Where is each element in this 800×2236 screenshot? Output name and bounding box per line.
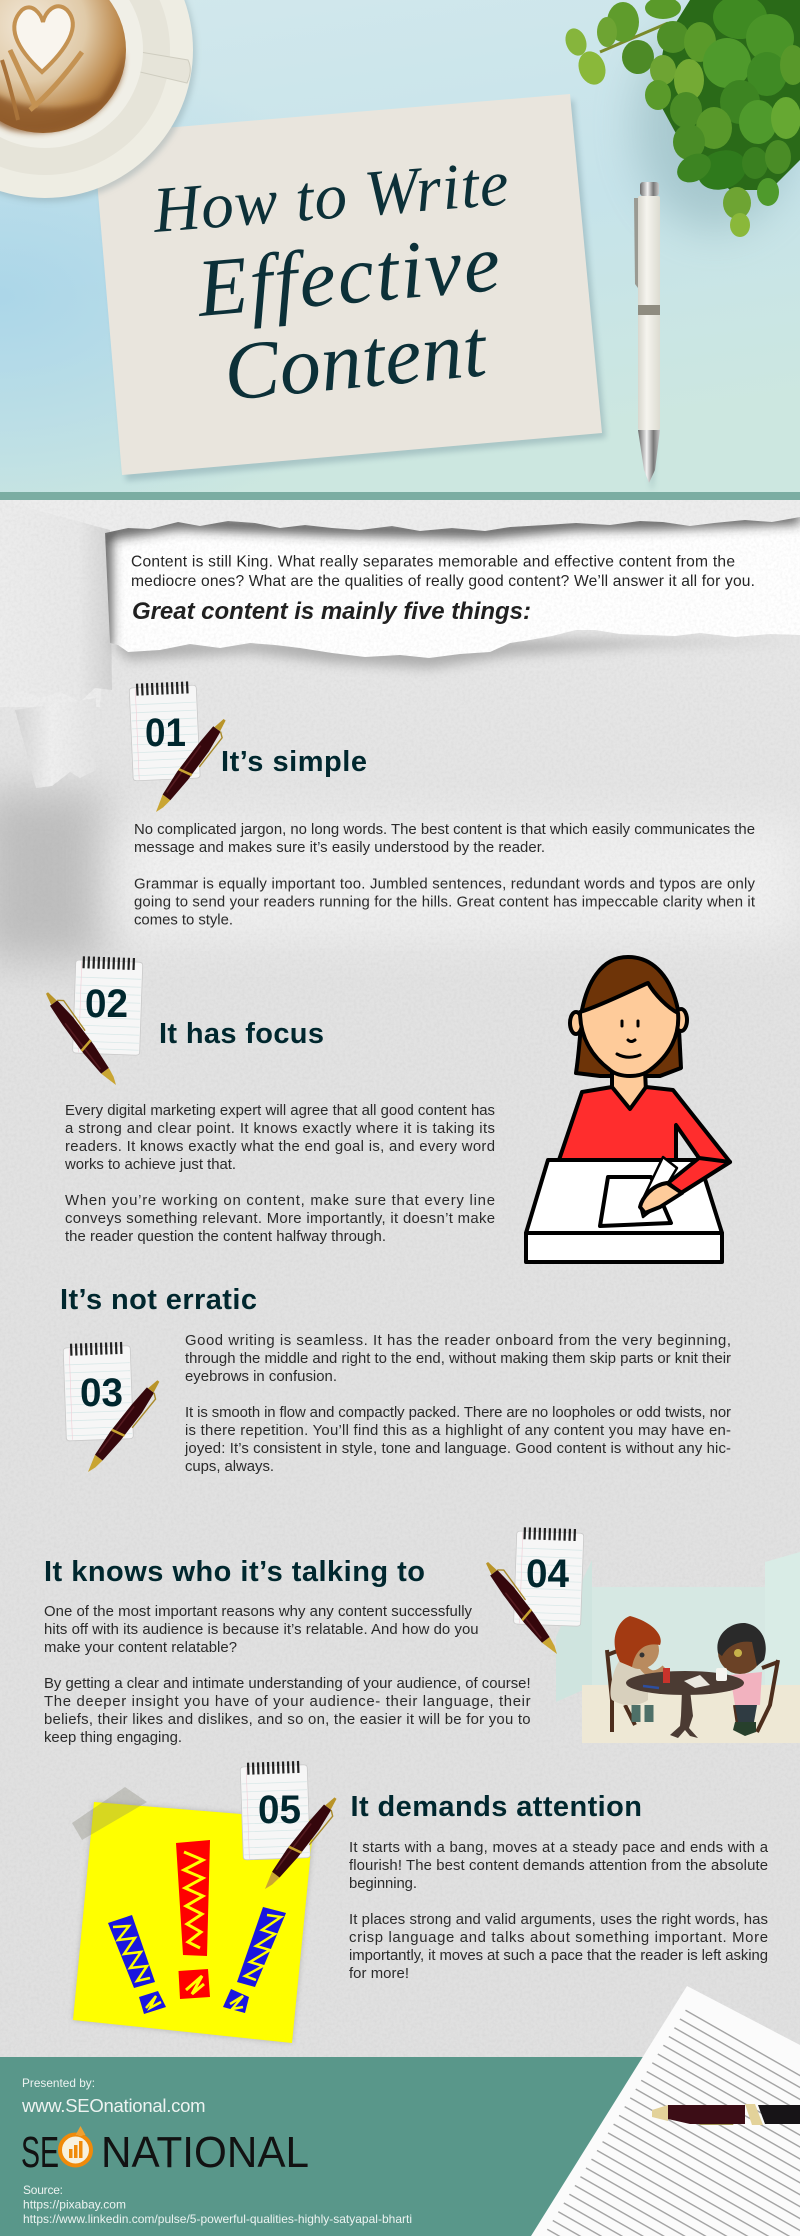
presented by text: Presented by:	[22, 2076, 95, 2090]
body text 04: hits off with its audience is because it’s relatable. And how do you	[44, 1622, 479, 1638]
body text 03: Good writing is seamless. It has the reader onboard from the very beginning,	[185, 1333, 731, 1349]
body text 03: through the middle and right to the end, without making them skip parts or knit their	[185, 1351, 731, 1367]
body text 05: crisp language and talks about something important. More	[349, 1930, 768, 1946]
left chair	[607, 1650, 635, 1732]
body text 04: One of the most important reasons why any content successfully	[44, 1604, 473, 1620]
pen 02	[41, 988, 123, 1089]
body text 02: When you’re working on content, make sure that every line	[65, 1193, 495, 1209]
notepad 05	[240, 1761, 310, 1860]
lined paper sheet	[531, 1986, 800, 2236]
body text 03: eyebrows in confusion.	[185, 1369, 337, 1385]
tape	[72, 1787, 147, 1840]
body text 01: message and makes sure it’s easily understood by the reader.	[134, 840, 545, 856]
right chair	[735, 1660, 778, 1732]
body text 05: It starts with a bang, moves at a steady pace and ends with a	[349, 1840, 769, 1856]
room walls	[592, 1587, 765, 1690]
source credits: https://pixabay.com	[23, 2198, 126, 2212]
desk	[526, 1160, 722, 1233]
neck	[612, 1070, 646, 1109]
glow behind section 01 text	[110, 822, 800, 940]
icon: coffee cup and saucer	[0, 0, 196, 202]
right blue exclamation mark	[223, 1907, 286, 2013]
illustration: two friends at a cafe table	[556, 1552, 800, 1743]
intro text: mediocre ones? What are the qualities of really good content? We’ll answer it all for you.	[131, 573, 755, 590]
body text 03: joyed: It’s consistent in style, tone and language. Good content is without any hic-	[184, 1441, 731, 1457]
wall background	[0, 494, 800, 2057]
footer pen	[652, 2104, 800, 2125]
shirt	[559, 1087, 730, 1193]
body text 04: The deeper insight you have of your audience- their language, their	[44, 1694, 531, 1710]
body text 05: for more!	[349, 1966, 409, 1982]
body text 05: flourish! The best content demands attention from the absolute	[349, 1858, 768, 1874]
notepad 02	[73, 956, 143, 1055]
pen 05	[259, 1794, 342, 1895]
body text 04: keep thing engaging.	[44, 1730, 182, 1746]
notepad 03	[63, 1342, 133, 1441]
heading 02: It has focus	[159, 1018, 324, 1050]
title: How to Write Effective Content: How to Write	[150, 147, 511, 247]
left person	[610, 1616, 665, 1722]
body text 04	[44, 1604, 531, 1746]
title: How to Write Effective Content	[150, 147, 511, 418]
body text 05: importantly, it moves at such a pace that the reader is left asking	[349, 1948, 768, 1964]
SEO National logo	[21, 2126, 309, 2177]
pen 04	[481, 1557, 564, 1658]
section 04: It knows who it's talking to	[44, 1527, 800, 1746]
eyes and mouth	[617, 1021, 640, 1057]
body text 02: a strong and clear point. It knows exactly where it is taking its	[65, 1121, 495, 1137]
source credits: https://www.linkedin.com/pulse/5-powerful-qualities-highly-satyapal-bharti	[23, 2212, 412, 2226]
body text 04: beliefs, their likes and dislikes, and so on, the easier it will be for you to	[44, 1712, 531, 1728]
body text 03: It is smooth in flow and compactly packed. There are no loopholes or odd twists, nor	[185, 1405, 731, 1421]
teal divider bar	[0, 492, 800, 500]
body text 03	[184, 1333, 731, 1475]
number 01: 01	[145, 711, 186, 755]
section 03: It's not erratic	[60, 1284, 731, 1477]
pen 01	[150, 715, 232, 817]
footer panel	[0, 1986, 800, 2236]
body text 02: conveys something relevant. More importantly, it doesn’t make	[65, 1211, 495, 1227]
SEO National logo: SE	[21, 2128, 59, 2177]
notepad 01	[129, 681, 200, 781]
number 02: 02	[85, 982, 128, 1026]
notepad 04	[514, 1527, 584, 1626]
intro text: Content is still King. What really separates memorable and effective content from the	[131, 554, 735, 570]
number 05: 05	[258, 1788, 301, 1832]
torn shadow below panel	[110, 640, 800, 668]
icon: green plant	[562, 0, 800, 237]
title: How to Write Effective Content: Content	[220, 302, 492, 418]
icon: white pen	[634, 182, 660, 490]
body text 05: It places strong and valid arguments, uses the right words, has	[349, 1912, 768, 1928]
body text 01: comes to style.	[134, 912, 233, 928]
body text 02: Every digital marketing expert will agree that all good content has	[65, 1103, 495, 1119]
source credits: Source:	[23, 2183, 63, 2197]
torn top paper band	[0, 500, 800, 707]
title paper	[93, 94, 606, 481]
source credits	[23, 2183, 412, 2226]
paper texture	[0, 500, 800, 2057]
floor	[582, 1685, 800, 1743]
sheet of paper	[600, 1177, 671, 1226]
body text 04: By getting a clear and intimate understanding of your audience, of course!	[44, 1676, 531, 1692]
SEO National logo: NATIONAL	[101, 2128, 309, 2177]
body text 01: going to send your readers running for the hills. Great content has impeccable clarity when it	[134, 894, 756, 910]
section 01: It's simple	[129, 681, 756, 928]
body text 05: beginning.	[349, 1876, 417, 1892]
red exclamation mark	[176, 1840, 210, 1999]
torn paper intro panel	[0, 500, 800, 960]
title: How to Write Effective Content: Effective	[193, 217, 503, 334]
illustration: woman writing at desk	[526, 957, 730, 1262]
number 04: 04	[526, 1552, 570, 1596]
body text 05	[349, 1840, 769, 1982]
ears	[570, 1009, 687, 1034]
paper curl	[0, 500, 112, 960]
heading 03: It’s not erratic	[60, 1284, 257, 1316]
body text 03: is there repetition. You’ll find this as a highlight of any content you may have en-	[185, 1423, 731, 1439]
forearm	[668, 1158, 730, 1193]
hair	[576, 957, 681, 1076]
intro text: Great content is mainly five things:	[132, 598, 531, 625]
body text 02: works to achieve just that.	[64, 1157, 236, 1173]
heading 05: It demands attention	[350, 1791, 642, 1823]
hand	[640, 1183, 682, 1213]
desk background	[0, 0, 800, 494]
body text 01: Grammar is equally important too. Jumbled sentences, redundant words and typos are only	[134, 876, 756, 892]
body text 01	[134, 822, 756, 928]
left blue exclamation mark	[108, 1915, 166, 2014]
icon: orange O with bars and arrow	[60, 2126, 91, 2166]
heading 01: It’s simple	[221, 746, 367, 778]
right person	[717, 1623, 766, 1736]
section 02: It has focus	[41, 956, 730, 1262]
teal footer background	[0, 2057, 800, 2236]
pen 03	[82, 1377, 165, 1477]
yellow sticky note	[72, 1787, 314, 2043]
section 05: It demands attention	[72, 1761, 769, 2043]
cafe table	[626, 1668, 744, 1738]
body text 04: make your content relatable?	[44, 1640, 237, 1656]
pen held in hand	[640, 1157, 677, 1217]
body text 02: readers. It knows exactly what the end goal is, and every word	[65, 1139, 495, 1155]
number 03: 03	[80, 1371, 123, 1415]
header panel	[0, 0, 800, 494]
face	[580, 983, 678, 1076]
body text 03: cups, always.	[185, 1459, 274, 1475]
body text 01: No complicated jargon, no long words. The best content is that which easily communicates the	[134, 822, 755, 838]
website text: www.SEOnational.com	[21, 2095, 206, 2116]
body text 02	[64, 1103, 495, 1245]
body text 02: the reader question the content halfway through.	[65, 1229, 386, 1245]
intro text	[131, 554, 755, 625]
white panel	[105, 517, 800, 658]
heading 04: It knows who it’s talking to	[44, 1556, 425, 1588]
